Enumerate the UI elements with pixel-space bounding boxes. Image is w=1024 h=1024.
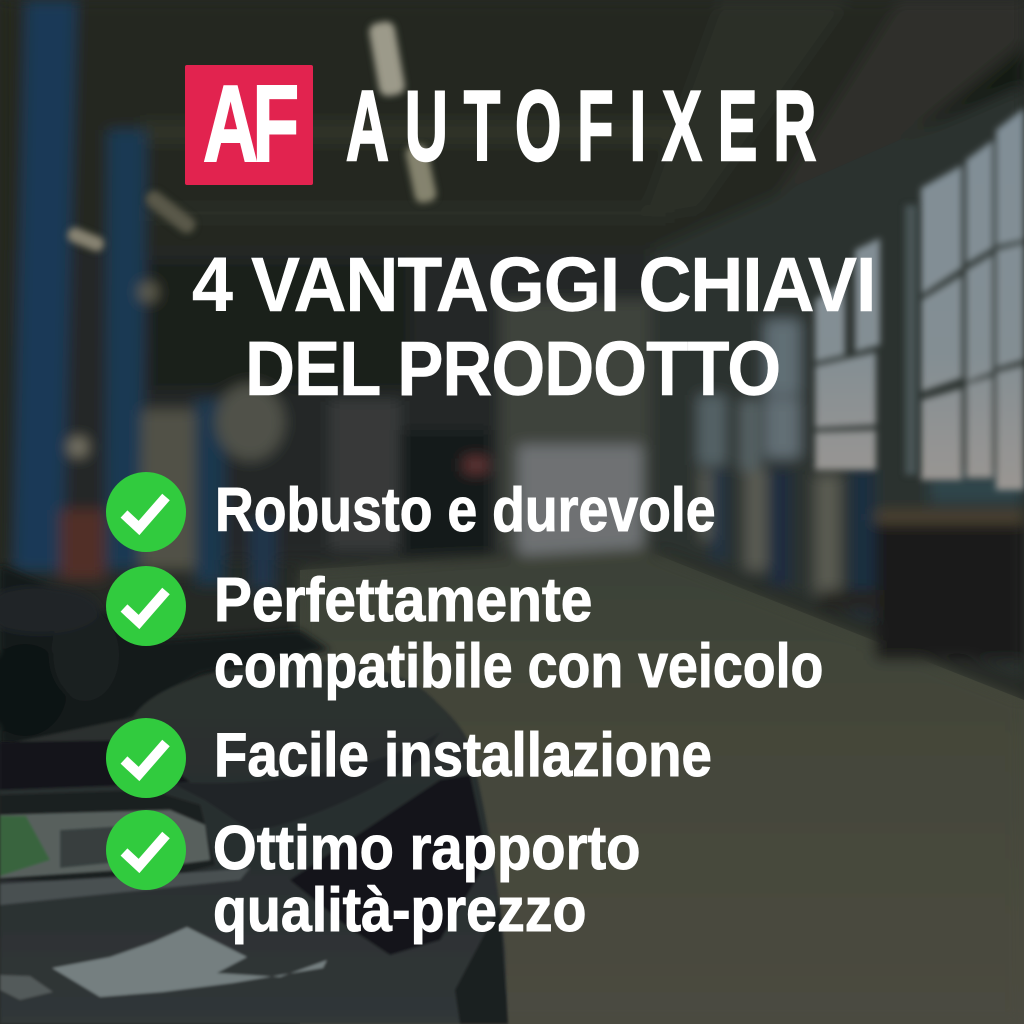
icon: green check: [106, 566, 186, 646]
car: [0, 661, 508, 1024]
lights: [368, 20, 406, 98]
title: [192, 242, 875, 412]
logo letters AF: AF: [203, 63, 294, 185]
far windows: [765, 320, 800, 395]
benefit text: Facile installazione: [214, 720, 712, 790]
benefit 1: [106, 472, 716, 552]
benefit 2: [106, 566, 823, 700]
floor: [300, 548, 1024, 1024]
ceiling: [0, 0, 1024, 250]
engine bay: [0, 565, 330, 745]
floor-to-cabinet: [875, 510, 1024, 660]
icon: green check: [106, 810, 186, 890]
windows: [815, 108, 1024, 490]
icon: green check: [106, 718, 186, 798]
logo: AF red square: [185, 65, 313, 185]
back wall area: [0, 250, 660, 560]
benefit text line 2: compatibile con veicolo: [214, 632, 823, 700]
benefit 4: [106, 810, 640, 944]
brand name: AUTOFIXER: [346, 70, 832, 181]
left pillars: [14, 0, 76, 572]
benefit text line 1: Ottimo rapporto: [213, 814, 640, 882]
benefit text: Robusto e durevole: [215, 476, 716, 544]
title line 1: 4 VANTAGGI CHIAVI: [192, 242, 875, 328]
icon: green check: [106, 472, 186, 552]
benefit text line 2: qualità-prezzo: [213, 876, 586, 944]
benefit text line 1: Perfettamente: [214, 566, 592, 634]
right wall base: [650, 85, 1024, 680]
benefit 3: [106, 718, 712, 798]
title line 2: DEL PRODOTTO: [245, 326, 780, 412]
